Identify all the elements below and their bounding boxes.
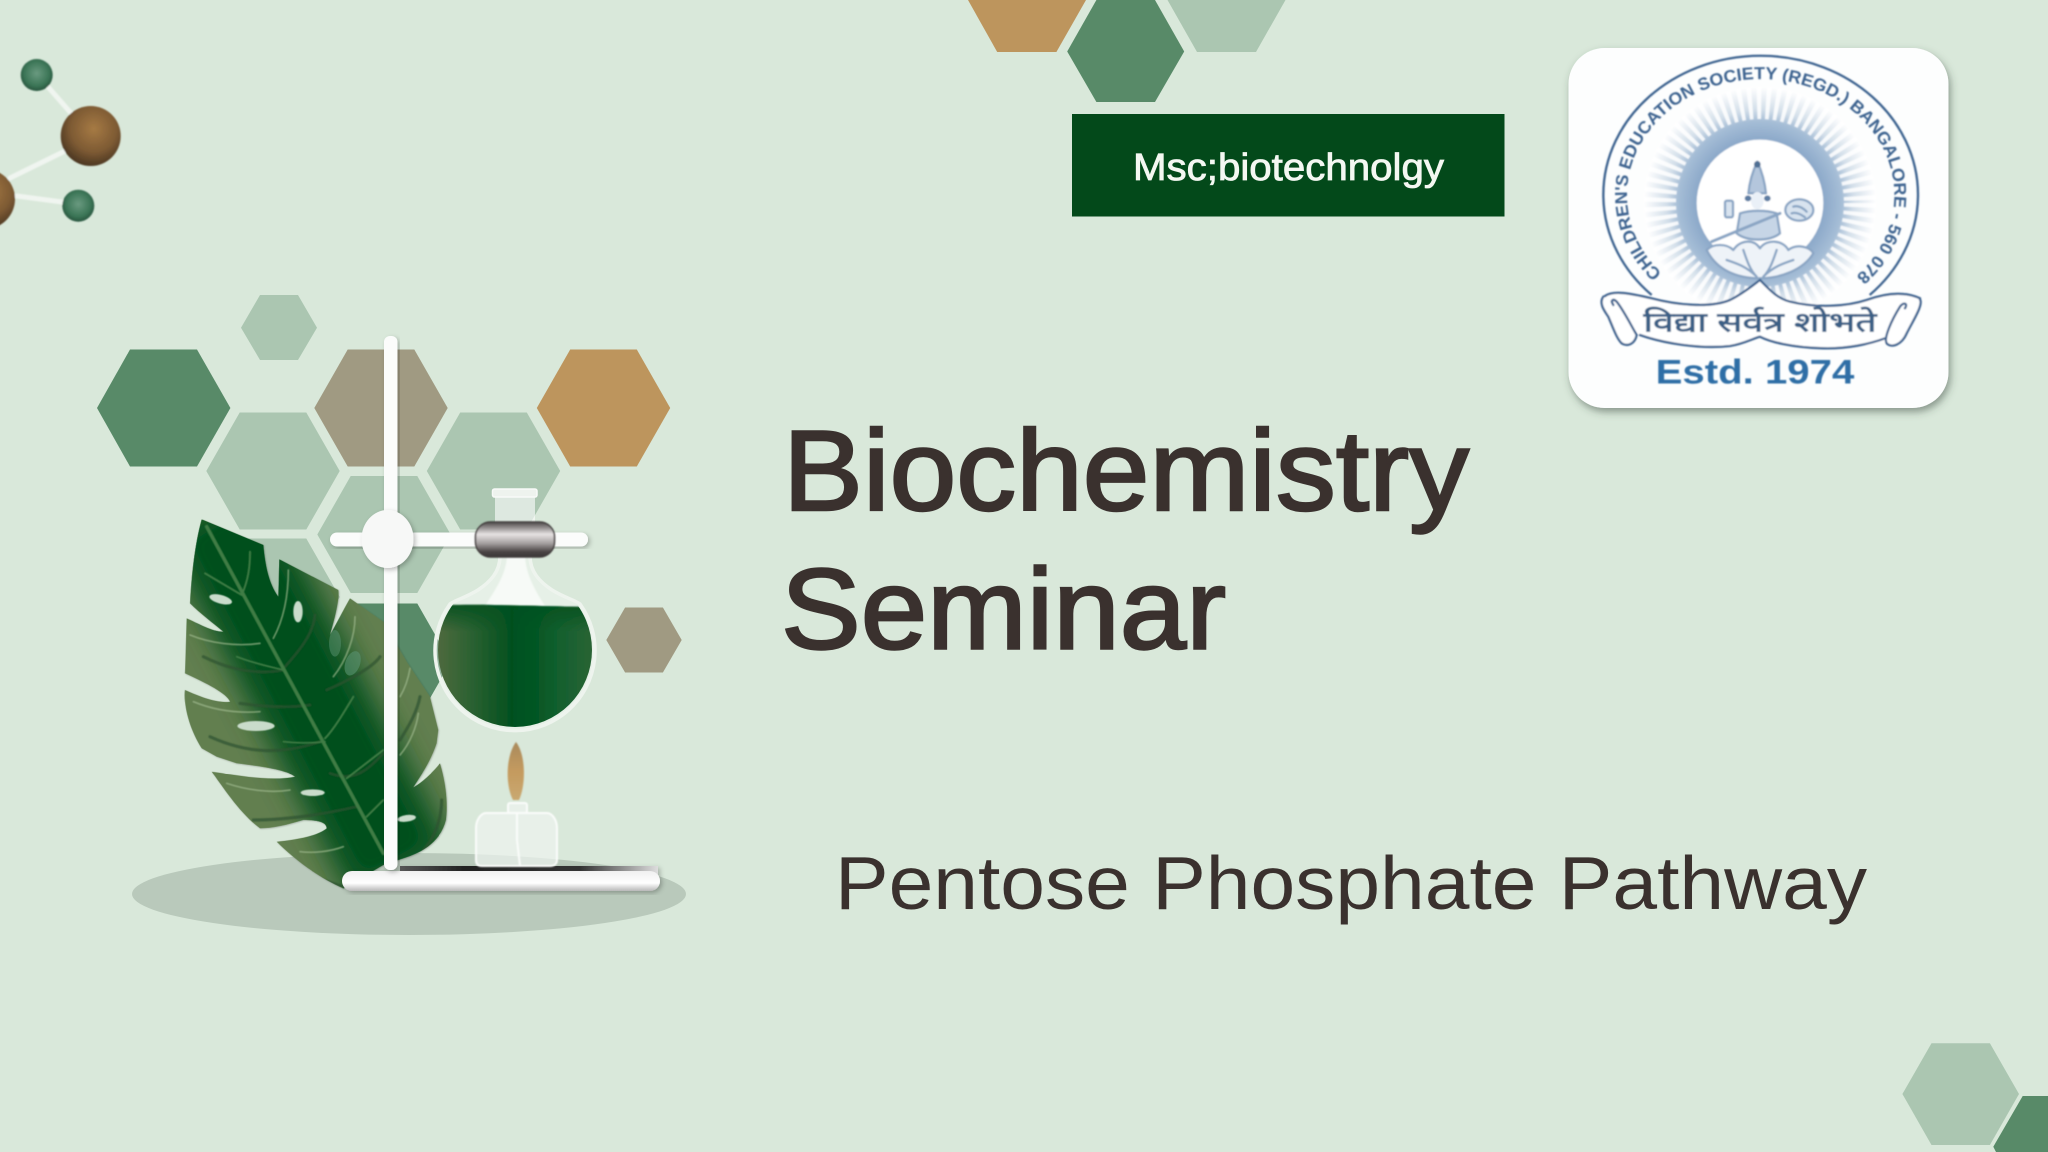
established year: Estd. 1974 (1656, 353, 1854, 391)
emblem (1599, 54, 1923, 391)
goddess figure (1707, 161, 1813, 278)
emblem ring (1603, 56, 1918, 295)
flask neck (495, 495, 535, 525)
badge: Msc;biotechnolgy: Msc;biotechnolgy (1133, 147, 1444, 189)
sunburst rays (1643, 86, 1877, 320)
flask liquid (438, 604, 592, 727)
logo card (1565, 46, 1956, 418)
title: Seminar (781, 546, 1226, 674)
title (781, 408, 1469, 674)
stand vertical pole (384, 336, 398, 870)
title: Biochemistry (783, 408, 1469, 535)
icon: lab stand with flask and burner (330, 336, 660, 891)
ring lettering: CHILDREN'S EDUCATION SOCIETY (REGD.) BANGALORE - 560 078 (1614, 66, 1908, 284)
ground shadow (132, 853, 686, 935)
subtitle: Pentose Phosphate Pathway (835, 841, 1867, 925)
flask lip (492, 489, 537, 497)
leaf holes (208, 592, 416, 823)
stand crossbar (330, 532, 588, 546)
leaf light veins (190, 570, 418, 852)
flask glass body (435, 556, 595, 731)
icon: monstera leaf (184, 520, 448, 890)
flask clamp (476, 522, 554, 557)
flask neck highlight (485, 556, 545, 606)
leaf dark ribs (203, 615, 442, 887)
scroll motto: विद्या सर्वत्र शोभते (1643, 307, 1877, 338)
hexagon cluster behind flask (97, 295, 682, 720)
flask (430, 489, 600, 740)
burner jar (476, 803, 557, 866)
scroll banner (1602, 280, 1921, 348)
stand base rod (342, 866, 660, 891)
stand joint (362, 510, 414, 568)
icon: molecule top left (0, 59, 121, 229)
bottom right hexagons (1902, 1043, 2048, 1152)
badge: Msc;biotechnolgy (1072, 114, 1504, 216)
burner flame (508, 742, 524, 800)
leaf midrib (205, 527, 383, 853)
top hexagon cluster (968, 0, 1286, 102)
